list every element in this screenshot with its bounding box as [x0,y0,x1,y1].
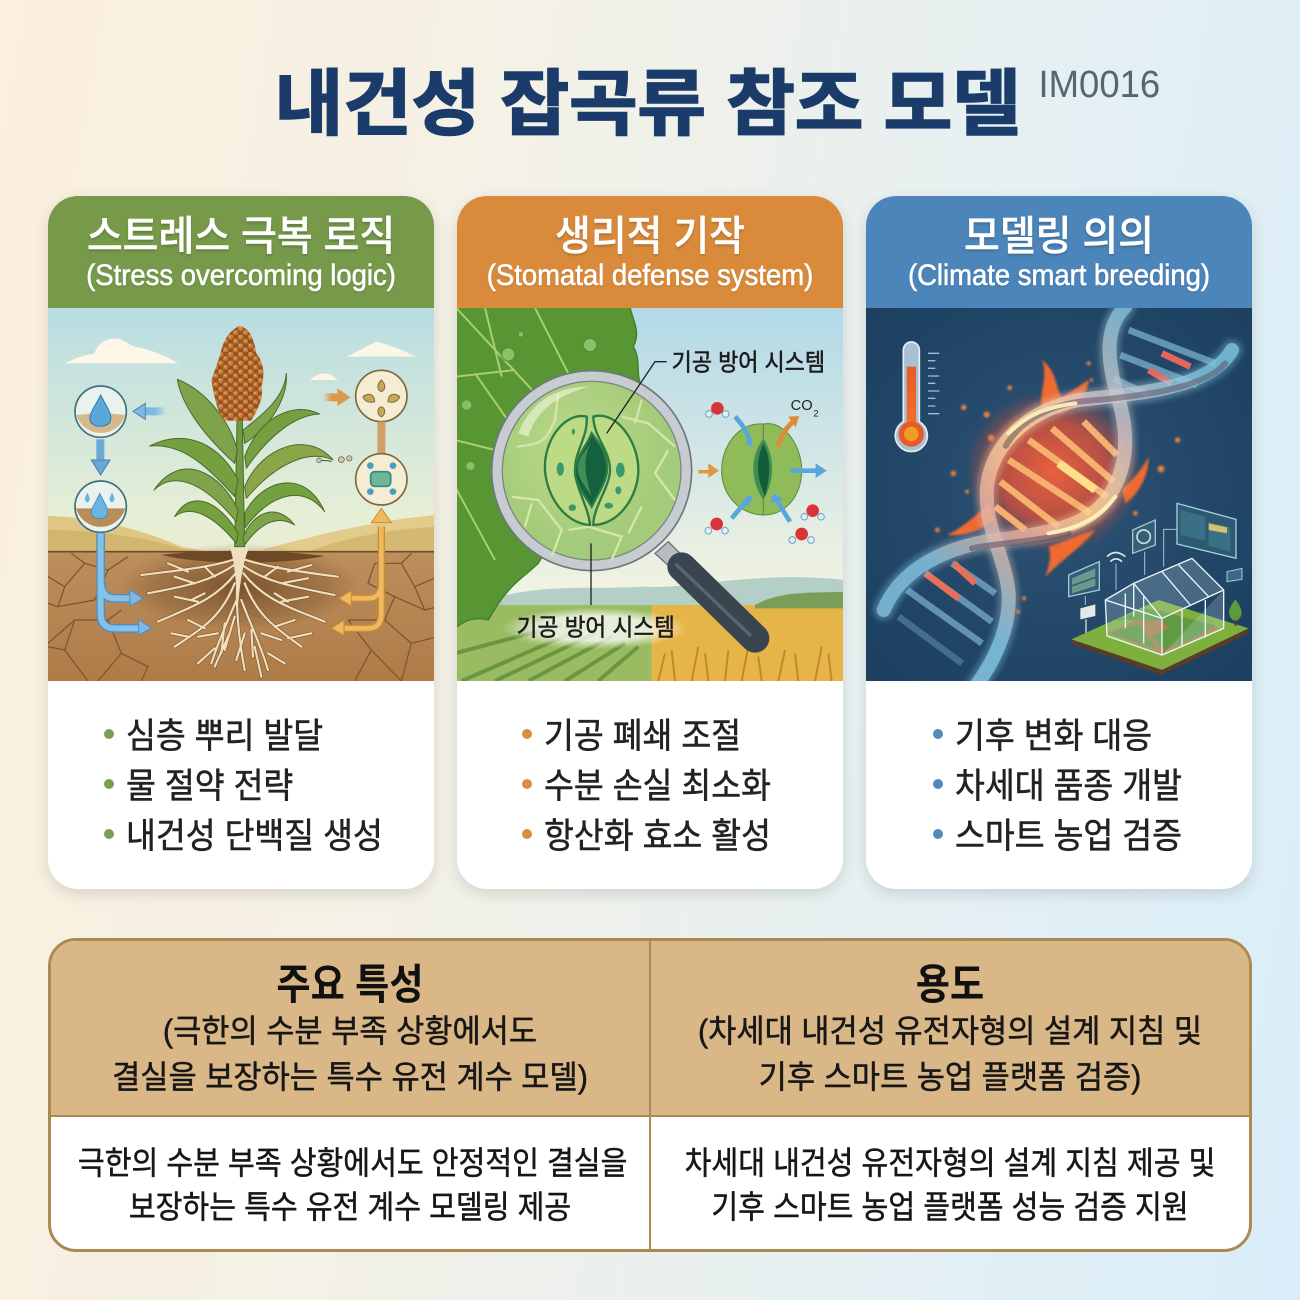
card header [457,196,843,308]
roots [141,547,338,677]
item: 수분 손실 최소화 [544,767,771,806]
title: 내건성 잡곡류 참조 모델 [275,65,1020,145]
stem and leaves [150,373,333,547]
bullet [522,729,532,739]
card header [866,196,1252,308]
note line: 결실을 보장하는 특수 유전 계수 모델) [112,1059,588,1095]
callout bottom: 기공 방어 시스템 [517,615,675,642]
note line: (극한의 수분 부족 상황에서도 [163,1013,537,1049]
item: 항산화 효소 활성 [544,817,771,856]
illustration: DNA, thermometer and smart greenhouse [866,308,1252,681]
left column heading: 주요 특성 [276,961,424,1008]
note line: 기후 스마트 농업 플랫폼 검증) [759,1059,1141,1095]
bullet [933,729,943,739]
panel: stomatal defense system [457,196,843,889]
fields [455,592,845,685]
list [104,717,383,856]
flames [947,360,1149,577]
bullet [522,829,532,839]
item: 기후 변화 대응 [955,717,1152,756]
list [933,717,1182,856]
body line: 차세대 내건성 유전자형의 설계 지침 제공 및 [685,1145,1215,1181]
left column note [112,1013,588,1095]
DNA strands [884,307,1232,687]
stoma diagram [698,398,827,522]
callout bottom [502,543,688,649]
panel: modeling significance [866,196,1252,889]
list [522,717,771,856]
heat glow [965,390,1142,553]
hills [48,515,435,557]
callout top: 기공 방어 시스템 [672,350,825,377]
bullet [104,779,114,789]
big leaf [455,300,642,628]
guard cells [545,416,638,525]
item: 내건성 단백질 생성 [126,817,383,856]
heading: 생리적 기작 [555,213,745,259]
bullet [933,829,943,839]
distant hills [498,577,845,610]
item: 스마트 농업 검증 [955,817,1182,856]
sorghum panicle [211,326,263,421]
sparks [935,361,1180,614]
bullet [104,729,114,739]
item: 물 절약 전략 [126,767,293,806]
item: 심층 뿌리 발달 [126,717,323,756]
subheading: (Climate smart breeding) [908,259,1210,292]
water molecules [705,402,824,543]
left column body [78,1145,627,1225]
clouds [65,339,416,380]
stoma diagram: CO [791,398,813,414]
subheading: (Stomatal defense system) [487,259,813,292]
magnifier lens [492,371,692,571]
magnifier handle [655,542,755,638]
item: 차세대 품종 개발 [955,767,1182,806]
model code: IM0016 [1039,64,1160,106]
dry cracked soil [48,543,438,690]
right column body [685,1145,1215,1225]
callout top [607,350,825,433]
orange nutrient arrows [331,508,391,635]
card header [48,196,434,308]
item: 기공 폐쇄 조절 [544,717,741,756]
greenhouse [1071,558,1249,675]
DNA rungs [899,330,1215,663]
bullet [933,779,943,789]
table header band [51,941,1249,1117]
column divider [649,941,651,1249]
bullet [104,829,114,839]
water uptake icons [75,386,166,532]
note line: (차세대 내건성 유전자형의 설계 지침 및 [698,1013,1202,1049]
panel: stress overcoming logic [48,196,434,889]
illustration: sorghum plant and roots [48,308,434,681]
nutrient icons [317,370,407,505]
right column heading: 용도 [916,961,984,1008]
illustration: magnified stomata [457,308,843,681]
right column note [698,1013,1202,1095]
bullet [522,779,532,789]
summary table [48,938,1252,1252]
smart farm sensor panels [1069,503,1242,635]
heading: 스트레스 극복 로직 [87,213,395,259]
stoma diagram: 2 [813,409,819,419]
blue water arrows [101,533,151,635]
body line: 극한의 수분 부족 상황에서도 안정적인 결실을 [78,1145,627,1181]
thermometer [895,342,939,452]
subheading: (Stress overcoming logic) [86,259,396,292]
heading: 모델링 의의 [964,213,1154,259]
body line: 보장하는 특수 유전 계수 모델링 제공 [129,1189,571,1225]
body line: 기후 스마트 농업 플랫폼 성능 검증 지원 [711,1189,1189,1225]
